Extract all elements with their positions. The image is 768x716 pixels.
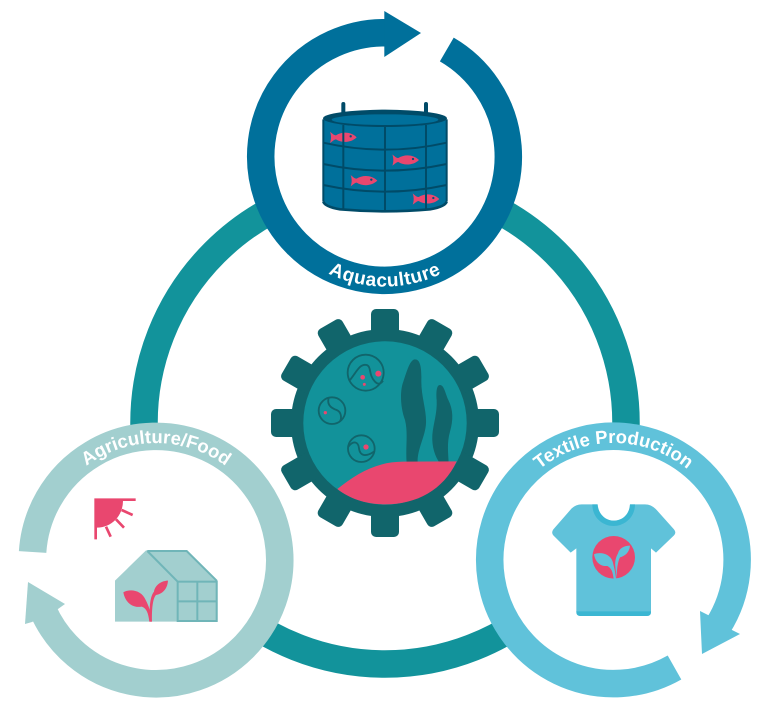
white backing disc	[490, 436, 738, 684]
ring arc	[261, 33, 508, 280]
gear inner disc	[303, 341, 467, 505]
panel: central gear	[271, 309, 499, 537]
label: Agriculture/Food: Agriculture/Food	[84, 430, 232, 466]
white backing disc	[32, 436, 280, 684]
gear body with teeth	[271, 309, 499, 537]
icon: fish cage	[323, 104, 447, 211]
label: Textile Production: Textile Production	[532, 430, 692, 468]
seaweed, cells and seabed	[319, 355, 457, 504]
connecting teal ring	[144, 182, 626, 664]
white backing disc	[261, 32, 509, 280]
arrow head	[700, 611, 740, 654]
icon: greenhouse	[115, 550, 218, 622]
panel: aquaculture ring	[246, 11, 522, 294]
icon: t-shirt	[552, 504, 675, 616]
label: Aquaculture: Aquaculture	[328, 264, 440, 287]
icon: sun	[94, 498, 136, 539]
arrow head	[25, 582, 65, 624]
ring arc	[490, 436, 737, 684]
arrow head	[384, 11, 421, 57]
panel: textile ring	[476, 422, 751, 698]
panel: agriculture ring	[18, 422, 294, 698]
ring arc	[33, 436, 280, 684]
